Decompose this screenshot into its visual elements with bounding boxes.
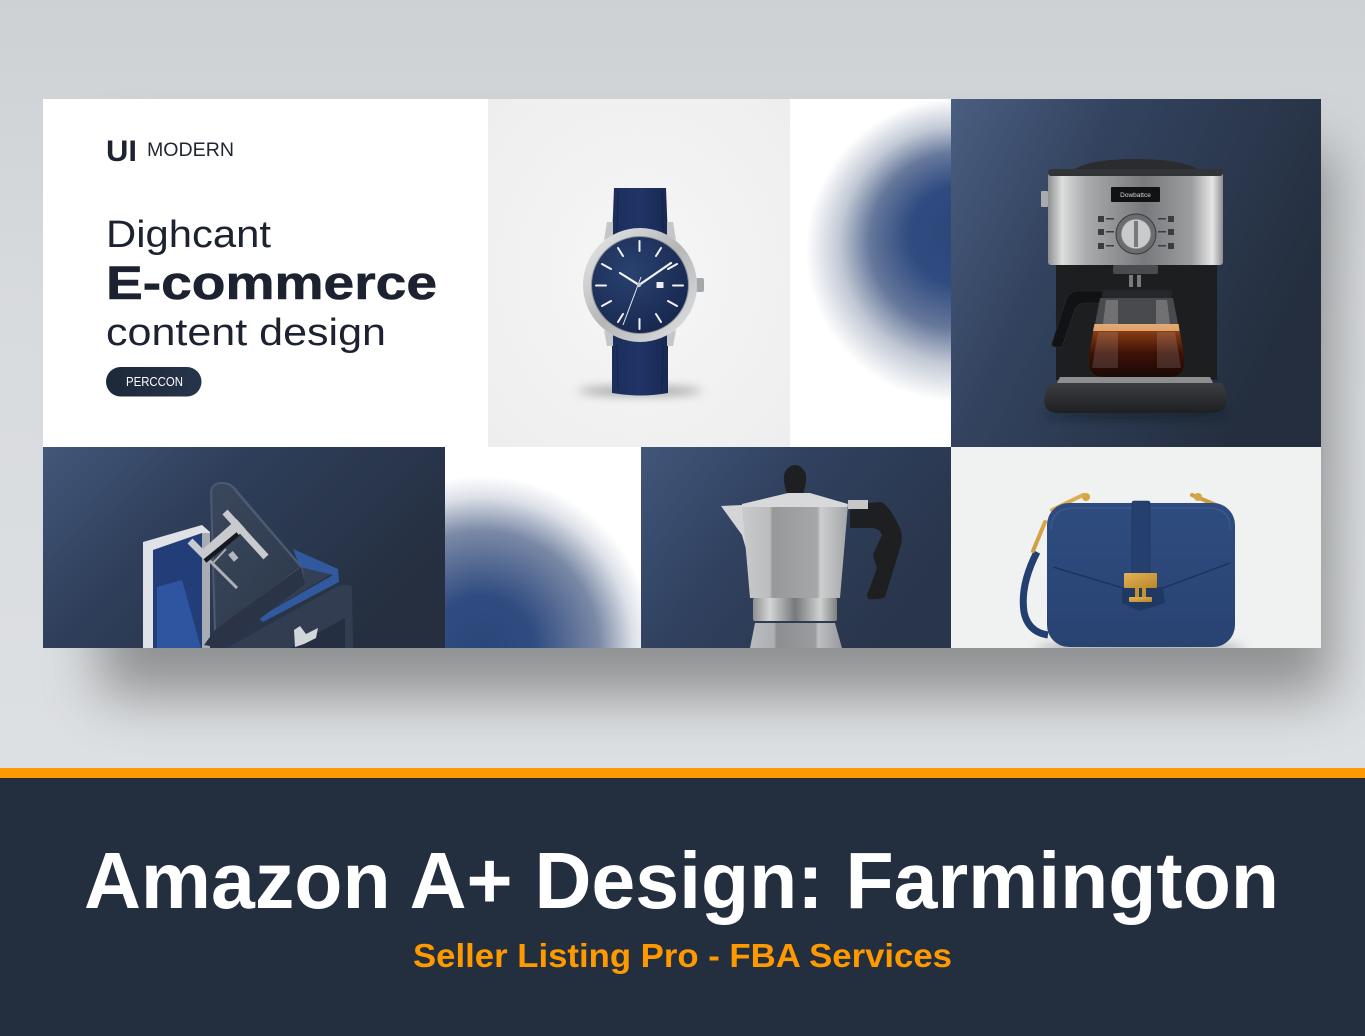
watch ground shadow (578, 387, 702, 395)
panel: handbag (951, 447, 1321, 652)
icon: moka pot (721, 465, 902, 648)
logo mark: UI (106, 135, 137, 168)
gold clasp (1124, 573, 1157, 602)
icon: handbag (1023, 493, 1235, 647)
carafe (1052, 290, 1184, 377)
icon: watch (583, 188, 704, 396)
panel: watch (488, 99, 790, 447)
headline line 3: content design (106, 312, 386, 354)
banner title: Amazon A+ Design: Farmington (84, 836, 1279, 925)
panel: blurred blue accent top (790, 99, 951, 447)
icon: abstract product box (143, 482, 353, 648)
metal clasp (190, 512, 266, 588)
panel: blurred blue accent bottom (445, 447, 641, 648)
display (1111, 187, 1160, 202)
headline line 2: E-commerce (106, 256, 437, 309)
logo word: MODERN (147, 139, 234, 161)
machine shadow (1044, 410, 1228, 418)
footer banner (0, 778, 1365, 1036)
orange rule (0, 768, 1365, 778)
bag ground shadow (1035, 644, 1245, 652)
pill button: PERCCON (126, 374, 183, 389)
panel: headline text block (43, 99, 488, 447)
display: Dowbattce (1120, 192, 1151, 199)
card drop shadow (100, 150, 1332, 695)
panel: coffee machine (951, 99, 1321, 447)
icon: coffee machine (1041, 159, 1228, 418)
panel: moka pot (641, 447, 951, 648)
headline line 1: Dighcant (106, 214, 271, 256)
pill button (106, 367, 202, 396)
panel: navy abstract product (43, 447, 445, 648)
banner subtitle: Seller Listing Pro - FBA Services (413, 937, 952, 974)
control dial (1116, 214, 1156, 254)
